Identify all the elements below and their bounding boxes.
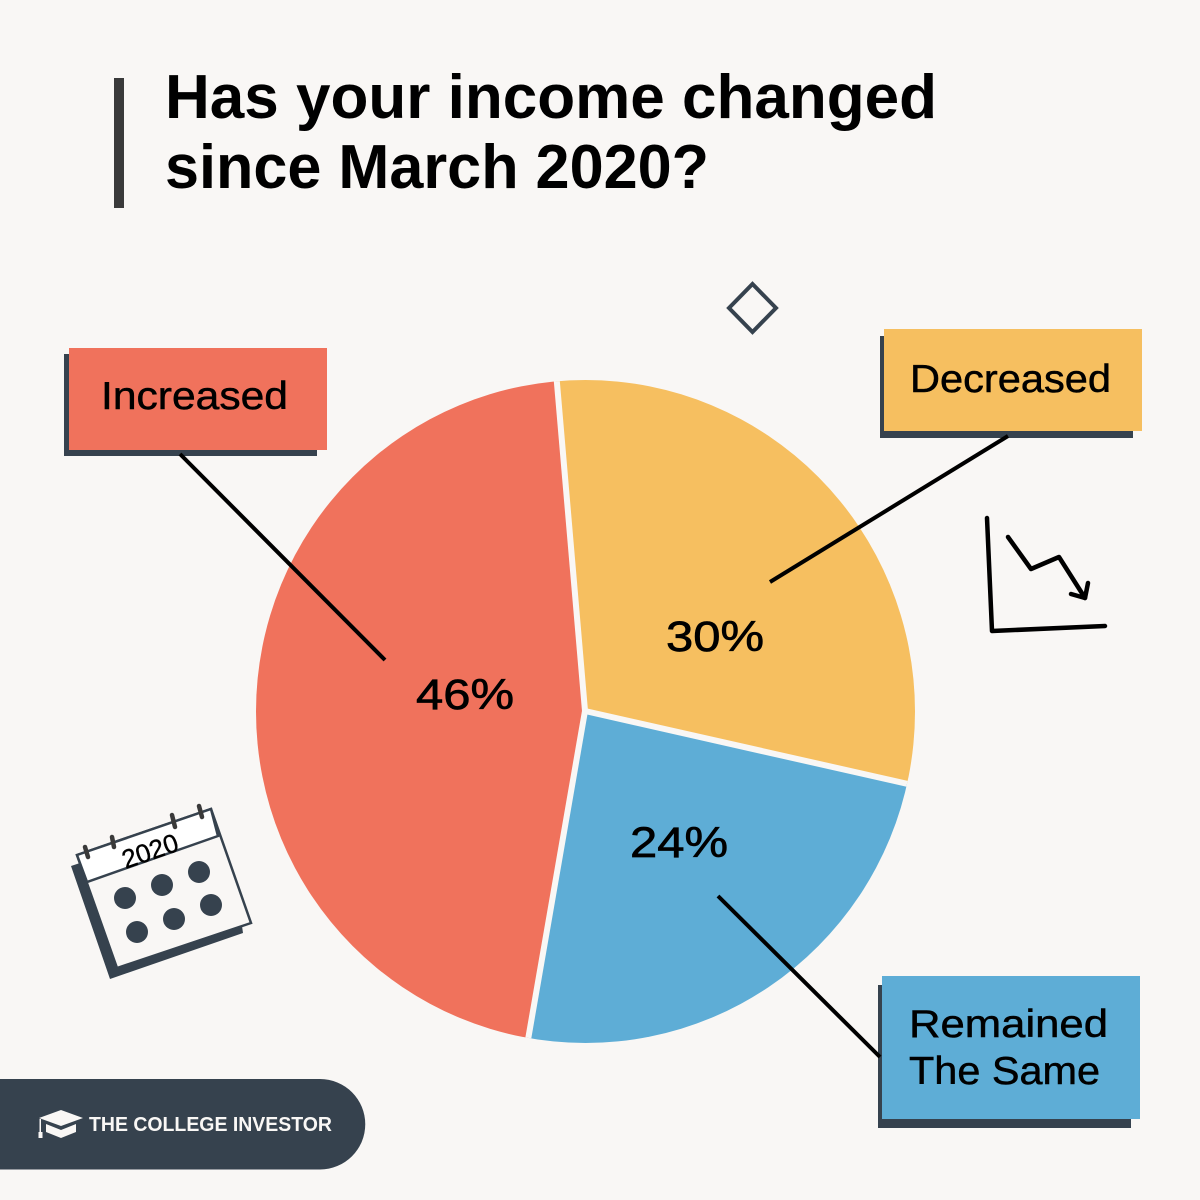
label: remained the same: Remained xyxy=(909,1003,1108,1046)
icon: falling line chart xyxy=(987,518,1105,631)
label: decreased xyxy=(880,329,1142,438)
title: since March 2020? xyxy=(165,133,709,202)
label: increased: Increased xyxy=(101,375,288,418)
value: 24%: 24% xyxy=(630,819,728,867)
value: 30%: 30% xyxy=(666,613,764,661)
icon: calendar 2020 xyxy=(71,806,251,979)
label: increased xyxy=(64,348,327,456)
leader line: decreased xyxy=(770,436,1008,582)
pie chart xyxy=(256,380,915,1043)
leader line: increased xyxy=(180,454,385,660)
value: 46%: 46% xyxy=(416,671,514,719)
brand name: THE COLLEGE INVESTOR xyxy=(89,1114,333,1136)
title xyxy=(165,63,937,202)
slice: decreased 30% xyxy=(556,374,930,789)
label: decreased: Decreased xyxy=(910,358,1111,401)
label: remained the same: The Same xyxy=(909,1050,1100,1093)
slice: increased 46% xyxy=(256,381,582,1038)
label: remained the same xyxy=(878,976,1140,1128)
title accent bar xyxy=(114,78,124,208)
slice: remained the same 24% xyxy=(528,714,907,1043)
title: Has your income changed xyxy=(165,63,937,132)
icon: diamond xyxy=(729,284,776,332)
icon: calendar 2020: 2020 xyxy=(118,827,182,875)
leader line: remained the same xyxy=(718,896,880,1057)
footer brand bar xyxy=(0,1079,365,1170)
icon: graduation cap xyxy=(38,1110,83,1138)
